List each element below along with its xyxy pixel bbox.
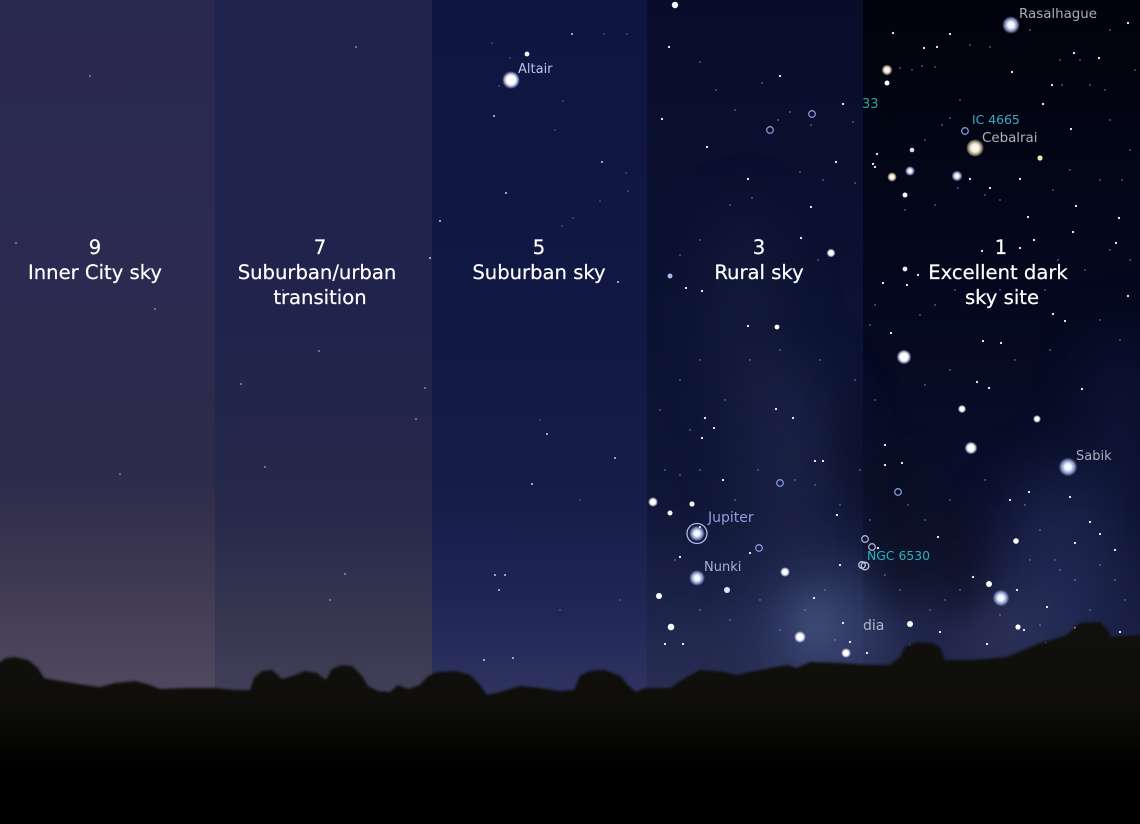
sky quality labels xyxy=(28,236,1068,309)
label: Altair: Altair xyxy=(518,62,553,77)
label: 1 Excellent dark sky site: sky site xyxy=(965,286,1039,309)
panel: Bortle 5 suburban sky xyxy=(432,0,647,700)
Milky Way haze xyxy=(739,352,1140,668)
bright stars with glow xyxy=(502,16,1078,658)
label: 1 Excellent dark sky site: Excellent dark xyxy=(928,261,1068,284)
label: IC 4665: IC 4665 xyxy=(972,112,1020,127)
panel: Bortle 1 excellent dark sky xyxy=(863,0,1140,700)
label: 1 Excellent dark sky site: 1 xyxy=(995,236,1007,259)
panel: Bortle 9 inner city sky xyxy=(0,0,215,700)
star field: medium stars xyxy=(525,2,1043,630)
label: 7 Suburban/urban transition: transition xyxy=(273,286,367,309)
label: Jupiter: Jupiter xyxy=(707,510,754,526)
star labels xyxy=(518,7,1112,634)
label: 9 Inner City sky: Inner City sky xyxy=(28,261,162,284)
label: 7 Suburban/urban transition: Suburban/urban xyxy=(238,261,396,284)
label: 3 Rural sky: Rural sky xyxy=(714,261,804,284)
label: NGC 6530: NGC 6530 xyxy=(867,548,930,563)
deep sky object rings xyxy=(756,111,968,570)
label: Cebalrai: Cebalrai xyxy=(982,131,1037,146)
panel: Bortle 3 rural sky xyxy=(647,0,863,700)
label: Sabik: Sabik xyxy=(1076,449,1112,464)
star field: rural and dark sky small stars xyxy=(660,23,1135,653)
label: cropped text: dia xyxy=(863,618,884,634)
label: cropped catalog number: 33 xyxy=(862,97,879,112)
label: 7 Suburban/urban transition: 7 xyxy=(314,236,326,259)
planet: Jupiter with ring marker xyxy=(687,524,707,544)
label: 3 Rural sky: 3 xyxy=(753,236,765,259)
label: Nunki: Nunki xyxy=(704,560,741,575)
label: 5 Suburban sky: 5 xyxy=(533,236,545,259)
label: Rasalhague: Rasalhague xyxy=(1019,7,1097,22)
label: 5 Suburban sky: Suburban sky xyxy=(472,261,606,284)
landscape silhouette: trees and hills xyxy=(0,622,1140,824)
label: 9 Inner City sky: 9 xyxy=(89,236,101,259)
faint stars: light-polluted panels xyxy=(16,34,628,660)
panel: Bortle 7 suburban/urban transition sky xyxy=(215,0,432,700)
